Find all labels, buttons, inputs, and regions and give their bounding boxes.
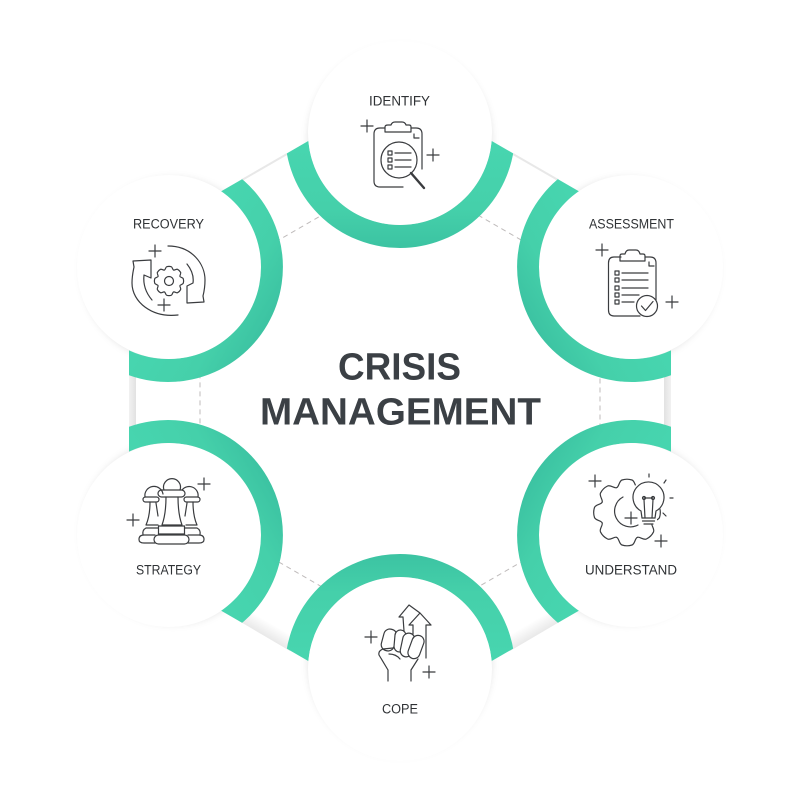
white node circles [77, 41, 723, 761]
white mask inside hexagon gap [200, 170, 600, 632]
green rings [129, 141, 671, 664]
circle soft shadows [82, 47, 718, 755]
icon: clipboard with magnifier [361, 120, 439, 188]
node: strategy [127, 478, 210, 578]
node: cope [365, 605, 435, 716]
node: identify [361, 94, 439, 188]
node: assessment [589, 216, 678, 316]
node: identify: IDENTIFY [369, 94, 430, 108]
dashed inner hexagon [200, 170, 600, 632]
node: assessment: ASSESSMENT [589, 216, 674, 232]
title [260, 346, 541, 434]
grey hexagon connectors [129, 154, 671, 651]
node: cope: COPE [382, 702, 418, 716]
node: recovery [132, 216, 205, 315]
node: recovery: RECOVERY [133, 216, 204, 232]
title: MANAGEMENT [260, 392, 541, 434]
node: strategy: STRATEGY [136, 562, 201, 578]
icon: chess pieces [127, 478, 210, 544]
icon: raised fist with arrows [365, 605, 435, 681]
icon: gear and light bulb [589, 474, 673, 547]
icon: clipboard with check [596, 244, 678, 316]
title: CRISIS [338, 346, 461, 388]
node: understand [585, 474, 677, 578]
node: understand: UNDERSTAND [585, 562, 677, 578]
icon: cycle arrows with gear [132, 245, 205, 315]
